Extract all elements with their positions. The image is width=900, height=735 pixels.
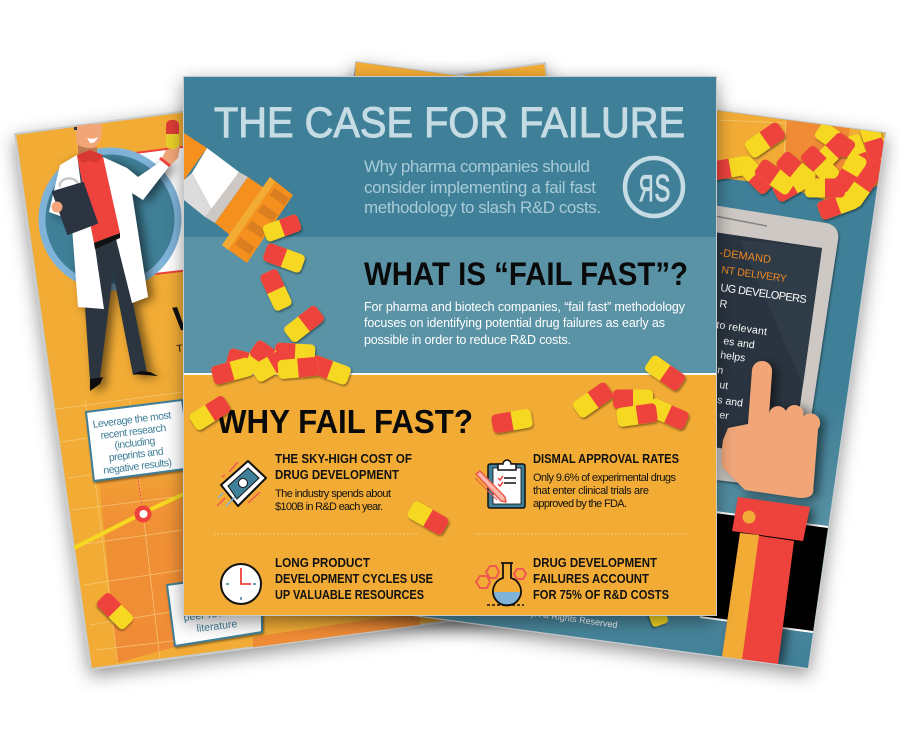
tablet screen text — [716, 247, 807, 422]
tablet screen text: UG DEVELOPERS — [720, 282, 807, 306]
subtitle — [364, 157, 601, 217]
text: fail fast definition: possible in order to reduce R&D costs. — [364, 333, 571, 347]
what is fail fast band — [184, 237, 716, 373]
callout: peer-reviewed literature: literature — [196, 618, 238, 635]
panel: main front page — [183, 76, 717, 616]
framed white panel behind scientist — [135, 146, 183, 276]
panel: right back page — [279, 62, 895, 668]
copyright line: Party. All Rights Reserved — [514, 606, 618, 630]
heading fragment on left page: W — [171, 297, 209, 339]
logo — [625, 158, 683, 216]
icon: clipboard in hand — [52, 178, 97, 234]
callout: leverage research: negative results) — [103, 457, 173, 477]
tablet screen text: to relevant — [716, 319, 768, 338]
pills: pile at top of right page — [717, 122, 884, 222]
text: dismal approval rates — [533, 452, 679, 510]
icon: clock — [221, 564, 261, 604]
black band with white rules — [700, 510, 828, 632]
item: drug development failures — [476, 556, 669, 605]
subheading fragment on left page: T — [176, 343, 183, 355]
pill: under main page — [646, 616, 668, 629]
icon: capsule in raised hand — [160, 120, 180, 166]
callout: leverage research: (including — [114, 435, 156, 452]
callout: leverage research: preprints and — [108, 445, 164, 464]
panel: left back page — [15, 60, 621, 669]
tablet screen text: er — [719, 409, 730, 422]
subtitle: consider implementing a fail fast — [364, 178, 596, 197]
icon: flying banknote — [217, 461, 266, 506]
callout: leverage research — [86, 400, 192, 481]
subtitle: Why pharma companies should — [364, 157, 590, 176]
tablet screen text: -DEMAND — [719, 247, 772, 266]
text: dismal approval rates: that enter clinical trials are — [533, 485, 649, 497]
chart line with marker — [74, 477, 190, 548]
text: fail fast definition — [364, 300, 686, 347]
text: dismal approval rates: DISMAL APPROVAL RATES — [533, 452, 679, 466]
callout: peer-reviewed literature — [167, 572, 262, 646]
icon: clipboard and pencil — [475, 460, 525, 508]
heading: what is fail fast: WHAT IS “FAIL FAST”? — [364, 256, 688, 292]
text: dismal approval rates: Only 9.6% of experimental drugs — [533, 472, 676, 484]
text: sky-high cost — [275, 452, 412, 513]
illustration: tablet — [717, 206, 840, 486]
item: long product development cycles — [221, 556, 433, 604]
circle behind scientist — [42, 151, 178, 287]
pill: left page — [95, 591, 135, 631]
logo: S — [654, 168, 670, 209]
subtitle: methodology to slash R&D costs. — [364, 198, 601, 217]
text: long product development: LONG PRODUCT — [275, 556, 370, 570]
text: drug development failures: FAILURES ACCOUNT — [533, 572, 649, 586]
callout: peer-reviewed literature: peer-reviewed — [183, 604, 251, 624]
text: drug development failures: FOR 75% OF R&D COSTS — [533, 588, 669, 602]
text: dismal approval rates: approved by the FDA. — [533, 498, 627, 510]
text: long product development: UP VALUABLE RESOURCES — [275, 588, 424, 602]
title: THE CASE FOR FAILURE — [214, 99, 685, 147]
pills: scattered on orange band — [188, 354, 690, 536]
tablet screen text: helps — [720, 349, 746, 364]
tablet screen text: ut — [719, 379, 729, 392]
tablet screen text: NT DELIVERY — [721, 264, 788, 285]
logo: R — [639, 169, 654, 210]
callout: leverage research: recent research — [100, 422, 167, 442]
text: fail fast definition: For pharma and biotech companies, “fail fast” methodology — [364, 300, 686, 314]
text: sky-high cost: DRUG DEVELOPMENT — [275, 468, 399, 482]
text: fail fast definition: focuses on identifying potential drug failures as early as — [364, 316, 665, 330]
callout: leverage research: Leverage the most — [92, 409, 172, 431]
text: sky-high cost: THE SKY-HIGH COST OF — [275, 452, 412, 466]
why fail fast band — [184, 373, 716, 615]
text: sky-high cost: $100B in R&D each year. — [275, 501, 383, 513]
illustration: pointing hand and sleeve — [722, 361, 820, 664]
illustration: spilled pill bottle — [184, 133, 293, 263]
item: sky-high cost — [217, 452, 412, 513]
heading: why fail fast: WHY FAIL FAST? — [217, 403, 473, 440]
tablet screen text: R — [719, 298, 728, 311]
tablet screen text: s and — [717, 394, 744, 410]
pills: falling from bottle and pile — [210, 213, 352, 386]
text: drug development failures — [533, 556, 669, 602]
text: long product development: DEVELOPMENT CYCLES USE — [275, 572, 433, 586]
item: dismal approval rates — [475, 452, 679, 510]
text: sky-high cost: The industry spends about — [275, 488, 391, 500]
icon: flask and molecules — [476, 563, 526, 605]
header band — [184, 77, 716, 237]
illustration: scientist — [49, 120, 180, 391]
text: drug development failures: DRUG DEVELOPMENT — [533, 556, 657, 570]
text: long product development — [275, 556, 433, 602]
tablet screen text: es and — [723, 335, 756, 351]
tablet screen text: n — [717, 364, 724, 377]
